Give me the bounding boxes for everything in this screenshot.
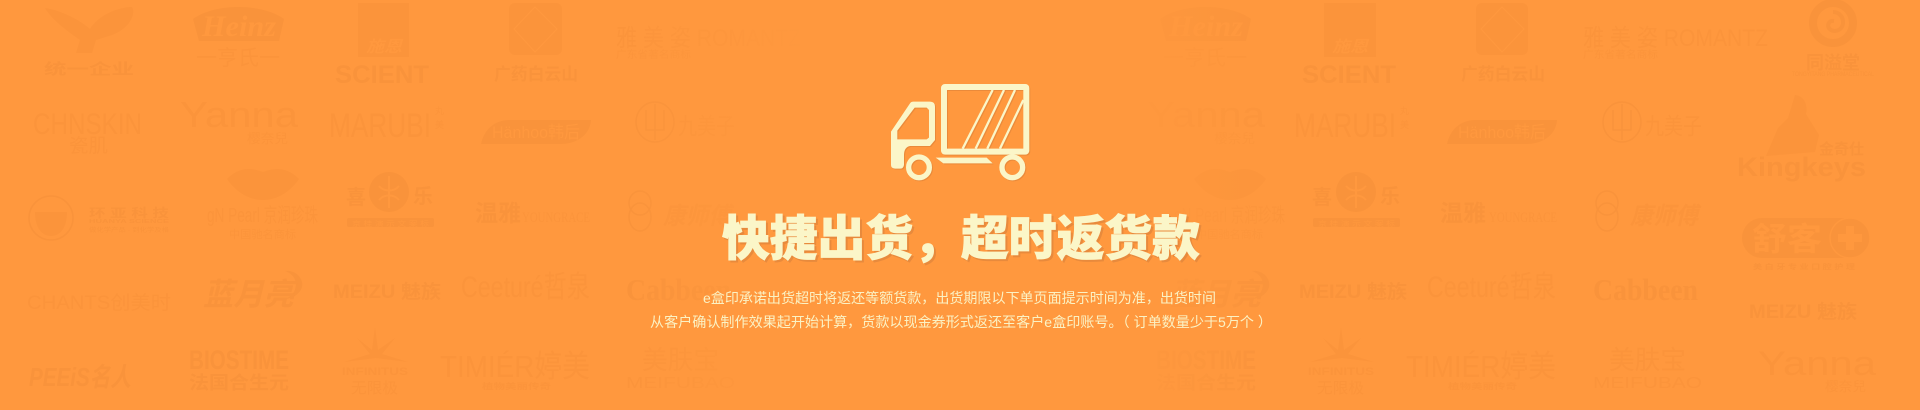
- logo: 雅美姿 ROMANTZ (left): 广东省著名商标: [616, 48, 691, 61]
- logo: Yanna (right): [1147, 94, 1266, 146]
- logo: MARUBI (right): 丸: [1400, 105, 1409, 116]
- logo: MARUBI (right): MARUBI: [1294, 107, 1396, 145]
- truck cargo box: [944, 87, 1026, 152]
- logo: 同溢堂: [1792, 3, 1875, 78]
- logo: 京润珍珠: 中国驰名商标: [229, 227, 296, 241]
- logo: 蓝月亮 (right): 蓝月亮: [1170, 277, 1266, 312]
- logo: 雅美姿 ROMANTZ (left): 雅 美 姿 ROMANTZ: [616, 25, 801, 52]
- logo: 舒客: 舒客: [1752, 221, 1822, 257]
- logo: Heinz: Heinz: [201, 10, 276, 43]
- logo: 施恩 SCIENT: SCIENT: [335, 61, 429, 89]
- logo: 温雅 YOUNGRACE: YOUNGRACE: [522, 210, 590, 226]
- logo: 喜乐: 京 桂 演 示 文 案 标: [352, 219, 429, 228]
- logo: CHINSKIN 瓷肌: [33, 108, 142, 157]
- logo: TIMIER 婷美: 植物美丽传奇: [482, 381, 551, 391]
- logo: TIMIER 婷美: TIMIÉR婷美: [440, 349, 590, 384]
- logo: BIOSTIME 合生元: 法国合生元: [189, 372, 289, 393]
- logo: Cabbeen (left): Cabbeen: [626, 272, 731, 307]
- logo: Yanna 樱奈兒: 樱奈兒: [247, 131, 288, 146]
- logo: 广药白云山 (right): 广药白云山: [1461, 65, 1545, 84]
- logo: 九美子 (right): 九美子: [1645, 113, 1702, 139]
- logo: 京润珍珠: gN Pearl 京润珍珠: [207, 204, 318, 227]
- logo: 广药白云山: [494, 3, 578, 84]
- logo: Kingkeys 金奇仕: Kingkeys: [1737, 152, 1866, 182]
- logo: 喜乐: 喜: [346, 186, 366, 209]
- logo: 统一企业: 统一企业: [44, 60, 134, 78]
- logo: 喜乐 (right): 喜: [1312, 186, 1332, 209]
- logo: Hanhoo: Hänhoo韩后: [492, 123, 580, 142]
- logo: 同溢堂: 同溢堂: [1806, 53, 1860, 73]
- logo: 康师傅 (right): [1596, 191, 1702, 231]
- logo: Kingkeys 金奇仕: [1737, 95, 1866, 182]
- logo: 施恩 SCIENT: 施恩: [366, 38, 404, 56]
- logo: INFINITUS 无限极 (right): [1308, 327, 1374, 397]
- logo: TIMIER 婷美 (right): 植物美丽传奇: [1448, 381, 1517, 391]
- logo: Cabbeen (right): Cabbeen: [1593, 272, 1698, 307]
- logo: Yanna (bottom right): 樱奈兒: [1825, 379, 1866, 394]
- logo: 温雅 YOUNGRACE (right): [1440, 200, 1557, 226]
- logo: 美肤宝 (left): MEIFUBAO: [626, 375, 735, 392]
- logo: Heinz: 一亨氏一: [196, 47, 280, 70]
- title: 快捷出货，超时返货款: [722, 213, 1200, 266]
- logo: 环亚科技: 环 亚 科 技: [89, 205, 169, 220]
- logo: 雅美姿 ROMANTZ (right): 广东省著名商标: [1583, 48, 1658, 61]
- logo: 喜乐: 乐: [413, 185, 433, 208]
- logo: 九美子 (left): [636, 102, 735, 142]
- front wheel: [909, 157, 929, 178]
- logo: 美肤宝 (left): [626, 345, 735, 392]
- logo: 康师傅 (left): 康师傅: [663, 203, 735, 230]
- logo: 九美子 (left): 九美子: [678, 113, 735, 139]
- logo: MARUBI: MARUBI: [329, 107, 431, 145]
- truck cab: [891, 102, 935, 169]
- logo: 施恩 SCIENT (right): 施恩: [1332, 38, 1370, 56]
- icon: delivery truck: [891, 87, 1026, 178]
- logo: Peeis 名人: PEEiS名人: [29, 362, 131, 392]
- logo: 雅美姿 ROMANTZ (right): 雅 美 姿 ROMANTZ: [1583, 25, 1768, 52]
- description text: [650, 290, 1272, 330]
- logo: Heinz: [193, 7, 284, 70]
- logo: 舒客: 美 白 牙 专 业 口 腔 护 理: [1753, 262, 1855, 271]
- logo: BIOSTIME 合生元: BIOSTIME: [189, 345, 289, 375]
- logo: Heinz (right): Heinz: [1168, 10, 1243, 43]
- logo: 环亚科技: 做化学产品 · 到化学及格: [89, 226, 169, 234]
- logo: Yanna (bottom right): [1758, 345, 1876, 394]
- logo: 广药白云山: 广药白云山: [494, 65, 578, 84]
- logo: 施恩 SCIENT (right): [1302, 3, 1396, 89]
- logo: 美肤宝 (right): 美肤宝: [1609, 345, 1686, 375]
- logo: 喜乐 (right): 乐: [1380, 185, 1400, 208]
- logo: 喜乐 (right): [1312, 172, 1400, 228]
- logo: INFINITUS 无限极: 无限极: [351, 380, 398, 397]
- logo: 喜乐: [346, 172, 434, 228]
- logo: 施恩 SCIENT: [335, 3, 429, 89]
- logo: 九美子 (right): [1603, 102, 1702, 142]
- logo: MARUBI: 美: [435, 119, 444, 130]
- description line 2: 从客户确认制作效果起开始计算，货款以现金券形式返还至客户e盒印账号。（ 订单数量少于5万个 ）: [650, 314, 1272, 330]
- logo: Hanhoo (right): Hänhoo韩后: [1458, 123, 1546, 142]
- logo: Kingkeys 金奇仕: 金奇仕: [1819, 140, 1864, 158]
- logo: Yanna 樱奈兒: Yanna: [180, 94, 299, 135]
- logo: CHINSKIN 瓷肌: 瓷肌: [69, 135, 108, 157]
- logo: INFINITUS 无限极: [342, 327, 408, 397]
- logo: 美肤宝 (right): [1593, 345, 1702, 392]
- logo: INFINITUS 无限极 (right): 无限极: [1317, 380, 1364, 397]
- logo: BIOSTIME 合生元 (right): 法国合生元: [1156, 372, 1256, 393]
- logo: 温雅 YOUNGRACE: [475, 200, 590, 226]
- logo: 温雅 YOUNGRACE (right): YOUNGRACE: [1489, 210, 1557, 226]
- logo: 施恩 SCIENT (right): SCIENT: [1302, 61, 1396, 89]
- logo: 美肤宝 (left): 美肤宝: [642, 345, 719, 375]
- logo: Yanna (right): 樱奈兒: [1214, 131, 1255, 146]
- rear wheel: [1002, 157, 1023, 178]
- logo: 京润珍珠: [207, 169, 318, 241]
- logo: MARUBI: 丸: [435, 105, 444, 116]
- logo: 康师傅 (right): 康师傅: [1630, 203, 1702, 230]
- logo: 舒客: [1742, 218, 1870, 271]
- logo: 雅美姿 ROMANTZ (right): [1583, 25, 1768, 61]
- logo: Heinz (right): [1160, 7, 1251, 70]
- logo: 京润珍珠 (right): gN Pearl 京润珍珠: [1174, 204, 1285, 227]
- logo: MEIZU 魅族 (far right): MEIZU 魅族: [1749, 300, 1857, 323]
- logo: 温雅 YOUNGRACE (right): 温雅: [1440, 200, 1486, 226]
- logo: 美肤宝 (right): MEIFUBAO: [1593, 375, 1702, 392]
- logo: BIOSTIME 合生元 (right): BIOSTIME: [1156, 345, 1256, 375]
- logo: CHANTS 创美时: CHANTS创美时: [27, 292, 171, 314]
- logo: MEIZU 魅族 (right): MEIZU 魅族: [1299, 280, 1407, 303]
- logo: Hanhoo: [481, 120, 591, 144]
- logo: INFINITUS 无限极: INFINITUS: [342, 366, 408, 378]
- logo: MARUBI (right): 美: [1400, 119, 1409, 130]
- logo: TIMIER 婷美 (right): TIMIÉR婷美: [1406, 349, 1556, 384]
- logo: Heinz (right): 一亨氏一: [1163, 47, 1247, 70]
- logo: Hanhoo (right): [1447, 120, 1557, 144]
- logo: BIOSTIME 合生元 (right): [1156, 345, 1256, 393]
- logo: 环亚科技: [29, 196, 170, 240]
- logo: 京润珍珠 (right): 中国驰名商标: [1196, 227, 1263, 241]
- logo: 温雅 YOUNGRACE: 温雅: [475, 200, 521, 226]
- logo: MEIZU 魅族: MEIZU 魅族: [333, 280, 441, 303]
- logo: 同溢堂: TONGYITANG PHARMACEUTICAL: [1792, 72, 1875, 78]
- logo: 广药白云山 (right): [1461, 3, 1545, 84]
- logo: Yanna 樱奈兒: [180, 94, 299, 146]
- logo: 统一企业: [44, 7, 134, 78]
- logo: 京润珍珠 (right): [1174, 169, 1285, 241]
- description line 1: e盒印承诺出货超时将返还等额货款，出货期限以下单页面提示时间为准，出货时间: [703, 290, 1216, 306]
- logo: INFINITUS 无限极 (right): INFINITUS: [1308, 366, 1374, 378]
- cargo stripes: [963, 90, 1023, 149]
- logo: 蓝月亮: 蓝月亮: [203, 277, 299, 312]
- logo: Ceeture 哲泉 (right): Ceeturé哲泉: [1427, 271, 1556, 304]
- logo: 环亚科技: HUANYA SCIENCE: [89, 219, 170, 225]
- truck chassis: [936, 158, 993, 163]
- logo: CHINSKIN 瓷肌: CHNSKIN: [33, 108, 142, 141]
- logo: Ceeture 哲泉: Ceeturé哲泉: [461, 271, 590, 304]
- logo: 雅美姿 ROMANTZ (left): [616, 25, 801, 61]
- logo: BIOSTIME 合生元: [189, 345, 289, 393]
- logo: 康师傅 (left): [629, 191, 735, 231]
- logo: Yanna (bottom right): Yanna: [1758, 345, 1876, 383]
- logo: 喜乐 (right): 京 桂 演 示 文 案 标: [1318, 219, 1395, 228]
- logo: Yanna (right): Yanna: [1147, 94, 1266, 135]
